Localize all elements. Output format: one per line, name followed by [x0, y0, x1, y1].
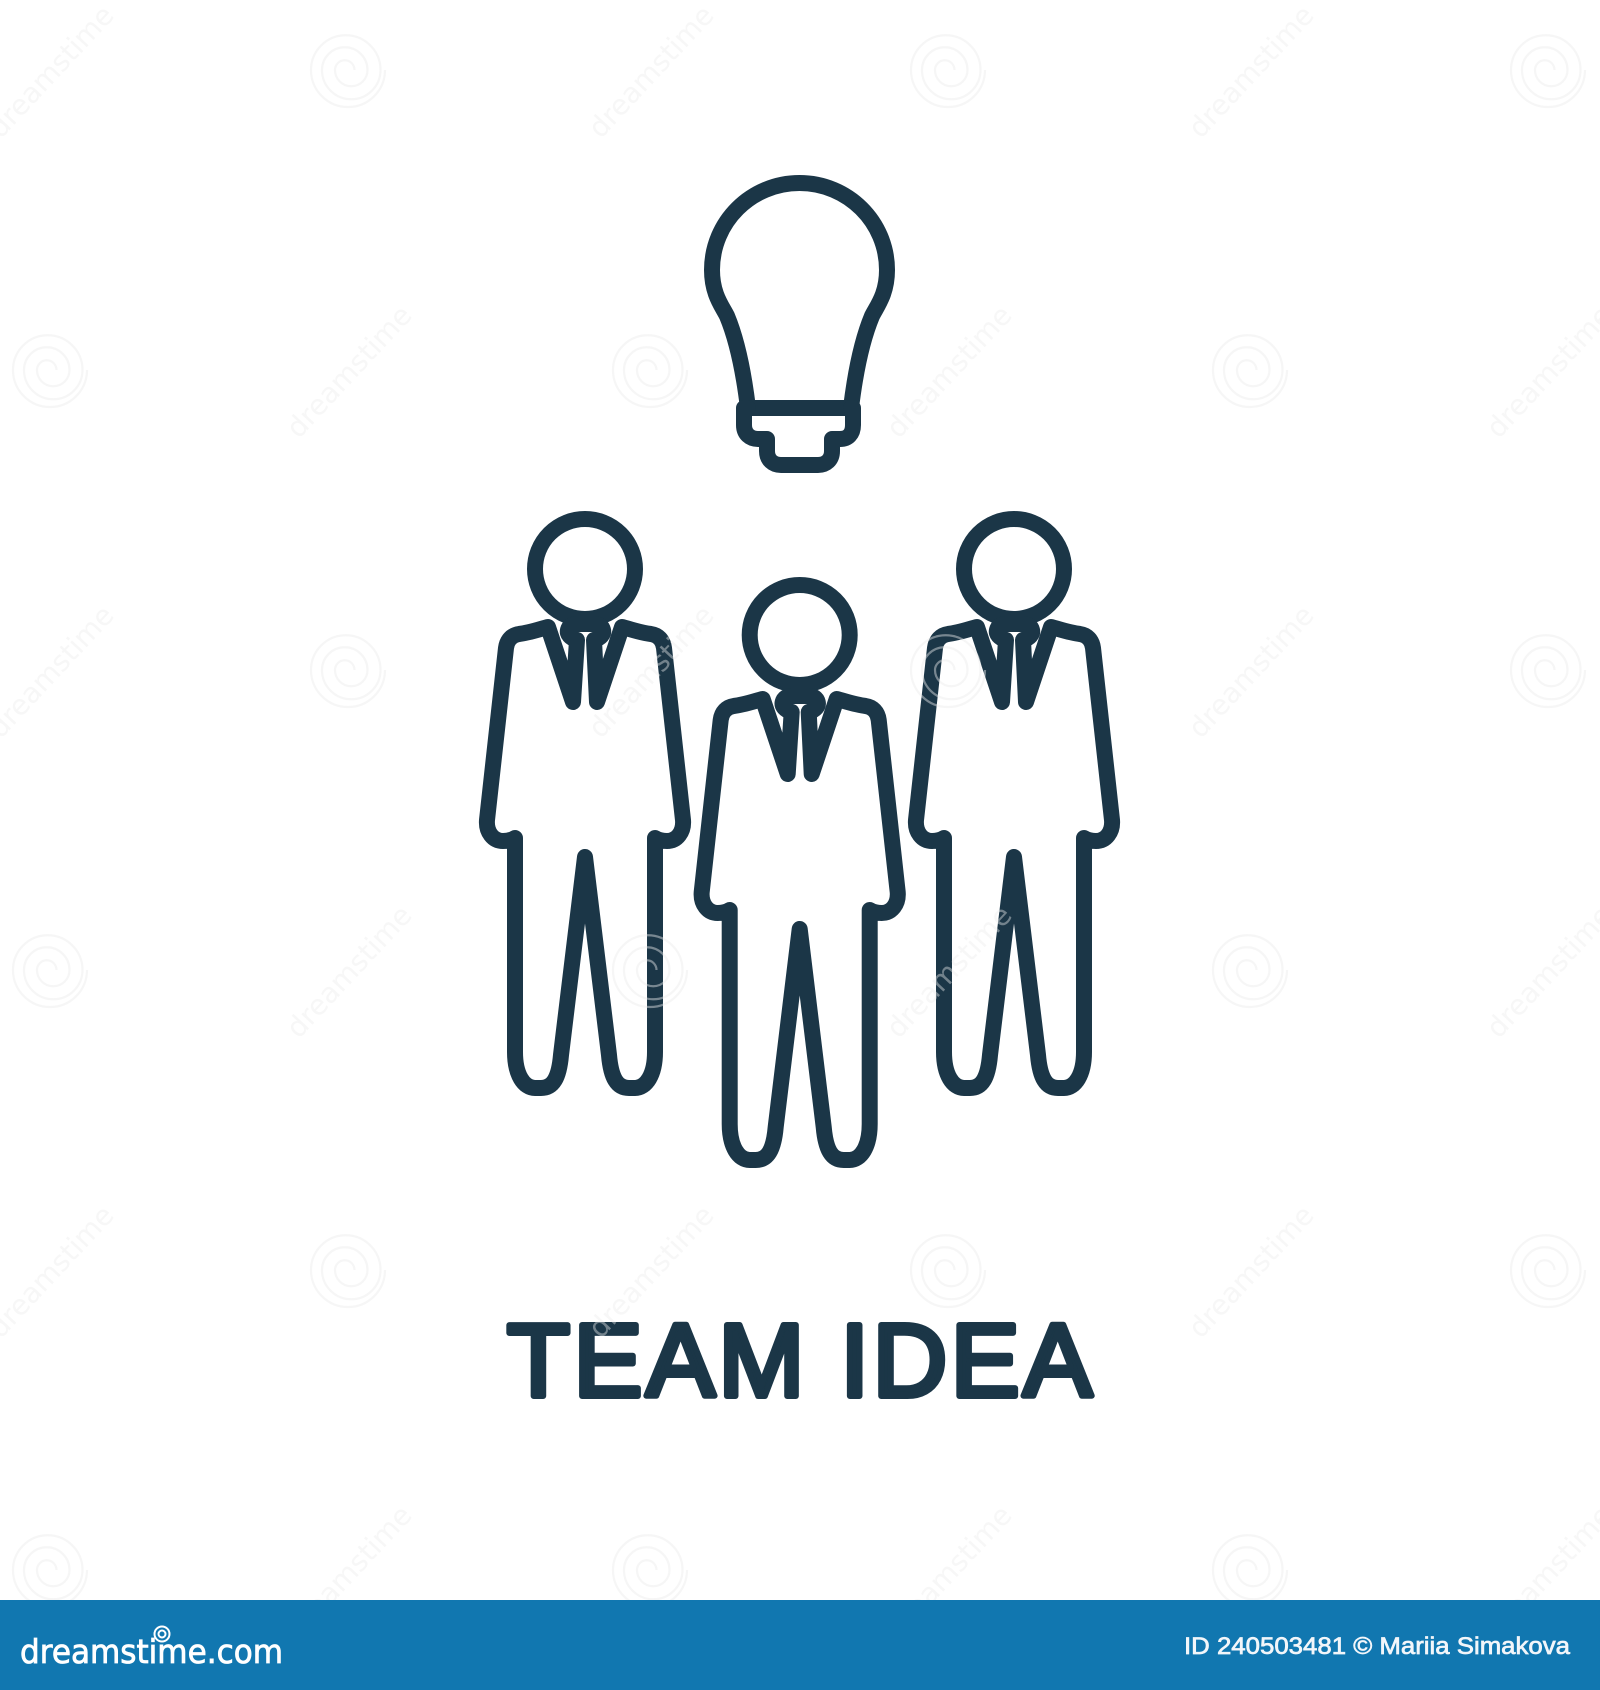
watermark pattern: dreamstime [280, 899, 418, 1044]
watermark pattern: dreamstime [582, 599, 720, 744]
watermark pattern: dreamstime [880, 299, 1018, 444]
footer bar [0, 1600, 1600, 1690]
head [535, 519, 635, 619]
icon: light bulb [712, 183, 887, 465]
suit and legs outline [487, 624, 683, 1088]
watermark pattern: dreamstime [582, 1199, 720, 1344]
watermark pattern: dreamstime [280, 1499, 418, 1644]
watermark pattern: dreamstime [880, 1499, 1018, 1644]
watermark pattern: dreamstime [1182, 1199, 1320, 1344]
title: TEAM IDEA [507, 1303, 1092, 1418]
watermark pattern: dreamstime [1182, 599, 1320, 744]
suit and legs outline [916, 624, 1112, 1088]
figure: left team member [487, 519, 683, 1088]
figure: centre team member [702, 585, 898, 1160]
watermark pattern: dreamstime [280, 299, 418, 444]
figure: right team member [916, 519, 1112, 1088]
watermark pattern: dreamstime [880, 899, 1018, 1044]
head [750, 585, 850, 685]
icon: logo spiral [154, 1626, 170, 1642]
watermark pattern: dreamstime [1182, 0, 1320, 144]
head [964, 519, 1064, 619]
suit and legs outline [702, 696, 898, 1160]
logo text: dreamstime.com [20, 1632, 283, 1671]
image id and credit: ID 240503481 © Mariia Simakova [1184, 1633, 1571, 1660]
watermark pattern: dreamstime [582, 0, 720, 144]
